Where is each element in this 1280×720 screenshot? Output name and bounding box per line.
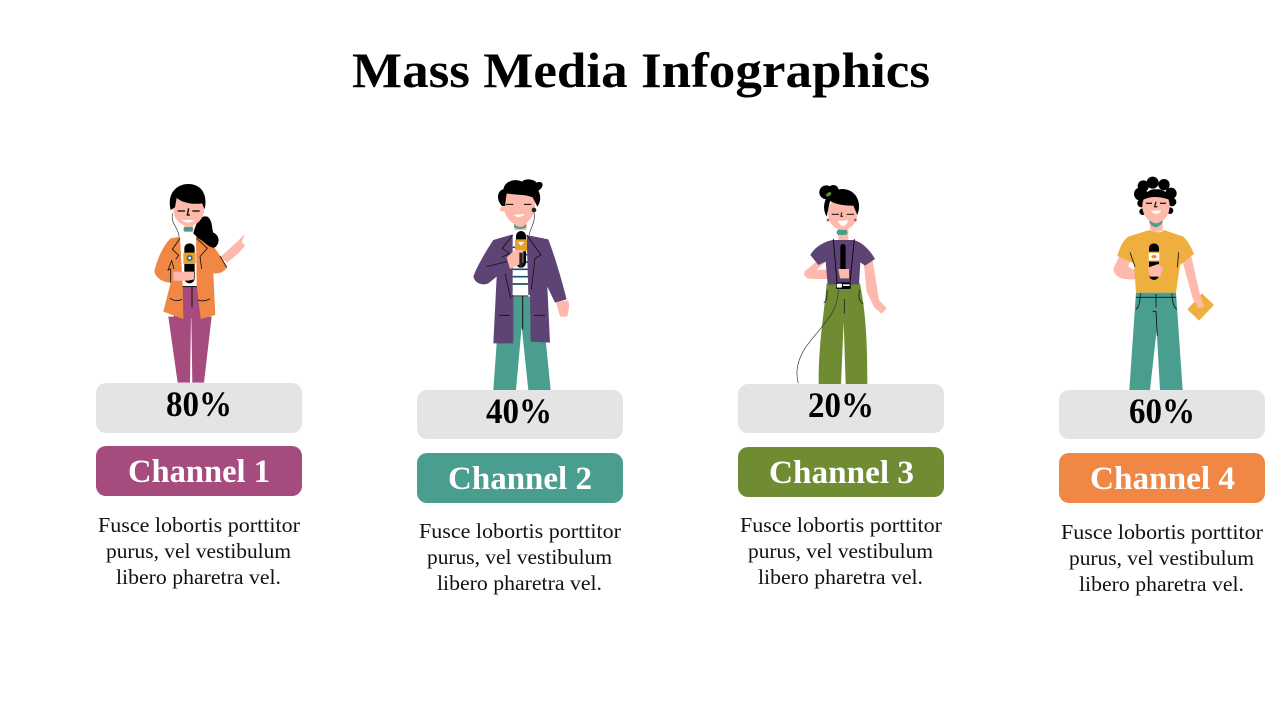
description 3	[740, 513, 942, 589]
description 1: purus, vel vestibulum	[106, 539, 291, 563]
percent box: 80%: 80%	[166, 384, 232, 424]
description 4	[1061, 520, 1263, 596]
description 1: Fusce lobortis porttitor	[98, 513, 300, 537]
panel: channel 4	[1059, 177, 1265, 596]
percent box: 20%	[738, 384, 944, 433]
description 1	[98, 513, 300, 589]
label: Channel 1	[96, 446, 302, 496]
title: Mass Media Infographics	[352, 42, 930, 98]
panel: channel 2	[417, 179, 623, 595]
percent box: 60%	[1059, 390, 1265, 439]
description 1: libero pharetra vel.	[116, 565, 281, 589]
illustration: female reporter in orange jacket	[154, 184, 245, 383]
label: Channel 2: Channel 2	[448, 461, 592, 497]
illustration: male reporter in yellow shirt	[1113, 177, 1214, 390]
description 3: Fusce lobortis porttitor	[740, 513, 942, 537]
description 2: Fusce lobortis porttitor	[419, 519, 621, 543]
label: Channel 1: Channel 1	[128, 454, 270, 490]
description 2: libero pharetra vel.	[437, 571, 602, 595]
description 2	[419, 519, 621, 595]
illustration: female reporter in purple top	[797, 185, 887, 384]
percent box: 40%	[417, 390, 623, 439]
description 3: libero pharetra vel.	[758, 565, 923, 589]
description 4: libero pharetra vel.	[1079, 572, 1244, 596]
label: Channel 4: Channel 4	[1090, 461, 1235, 497]
label: Channel 3: Channel 3	[769, 455, 914, 491]
description 4: Fusce lobortis porttitor	[1061, 520, 1263, 544]
label: Channel 3	[738, 447, 944, 497]
panel: channel 3	[738, 185, 944, 589]
description 4: purus, vel vestibulum	[1069, 546, 1254, 570]
description 2: purus, vel vestibulum	[427, 545, 612, 569]
label: Channel 4	[1059, 453, 1265, 503]
percent box: 80%	[96, 383, 302, 433]
percent box: 60%: 60%	[1129, 391, 1195, 431]
percent box: 20%: 20%	[808, 385, 874, 425]
description 3: purus, vel vestibulum	[748, 539, 933, 563]
percent box: 40%: 40%	[486, 391, 552, 431]
label: Channel 2	[417, 453, 623, 503]
panel: channel 1	[96, 184, 302, 589]
illustration: male reporter in purple coat	[473, 179, 569, 390]
